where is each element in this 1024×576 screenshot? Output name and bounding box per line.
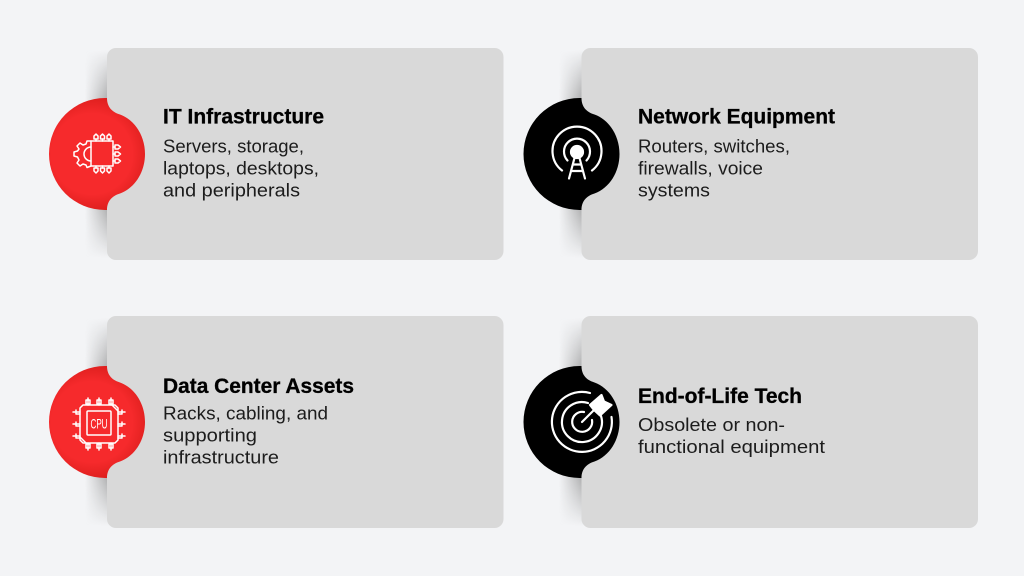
icon label: CPU: CPU bbox=[90, 416, 108, 432]
description: supporting bbox=[163, 424, 257, 446]
card background bbox=[107, 316, 504, 528]
badge: red lobe bbox=[49, 366, 145, 478]
description: infrastructure bbox=[163, 446, 279, 468]
panel: End-of-Life Tech bbox=[524, 316, 978, 528]
description: Routers, switches, bbox=[638, 136, 790, 156]
icon: antenna tower bbox=[552, 127, 602, 178]
description: and peripherals bbox=[163, 180, 300, 200]
heading: End-of-Life Tech bbox=[638, 385, 802, 408]
icon: target with arrow bbox=[552, 392, 612, 452]
card background bbox=[582, 316, 978, 528]
card background bbox=[582, 48, 978, 260]
description: Servers, storage, bbox=[163, 136, 304, 156]
description: systems bbox=[638, 180, 710, 200]
heading: Data Center Assets bbox=[163, 375, 354, 398]
panel: Network Equipment bbox=[524, 48, 978, 260]
badge: black lobe bbox=[524, 366, 620, 478]
panel: Data Center Assets bbox=[49, 316, 504, 528]
card background bbox=[107, 48, 504, 260]
heading: IT Infrastructure bbox=[163, 106, 324, 128]
panel: IT Infrastructure bbox=[49, 48, 504, 260]
description bbox=[163, 136, 319, 200]
heading: Network Equipment bbox=[638, 106, 835, 128]
description: laptops, desktops, bbox=[163, 158, 319, 178]
description: Racks, cabling, and bbox=[163, 402, 328, 424]
description: Obsolete or non- bbox=[638, 414, 785, 435]
description bbox=[638, 414, 825, 457]
badge: red lobe bbox=[49, 98, 145, 210]
description bbox=[163, 402, 328, 468]
icon: CPU chip bbox=[73, 398, 125, 450]
icon: chip with gear bbox=[74, 134, 120, 173]
description: functional equipment bbox=[638, 436, 825, 457]
badge: black lobe bbox=[524, 98, 620, 210]
description: firewalls, voice bbox=[638, 158, 763, 178]
description bbox=[638, 136, 790, 200]
